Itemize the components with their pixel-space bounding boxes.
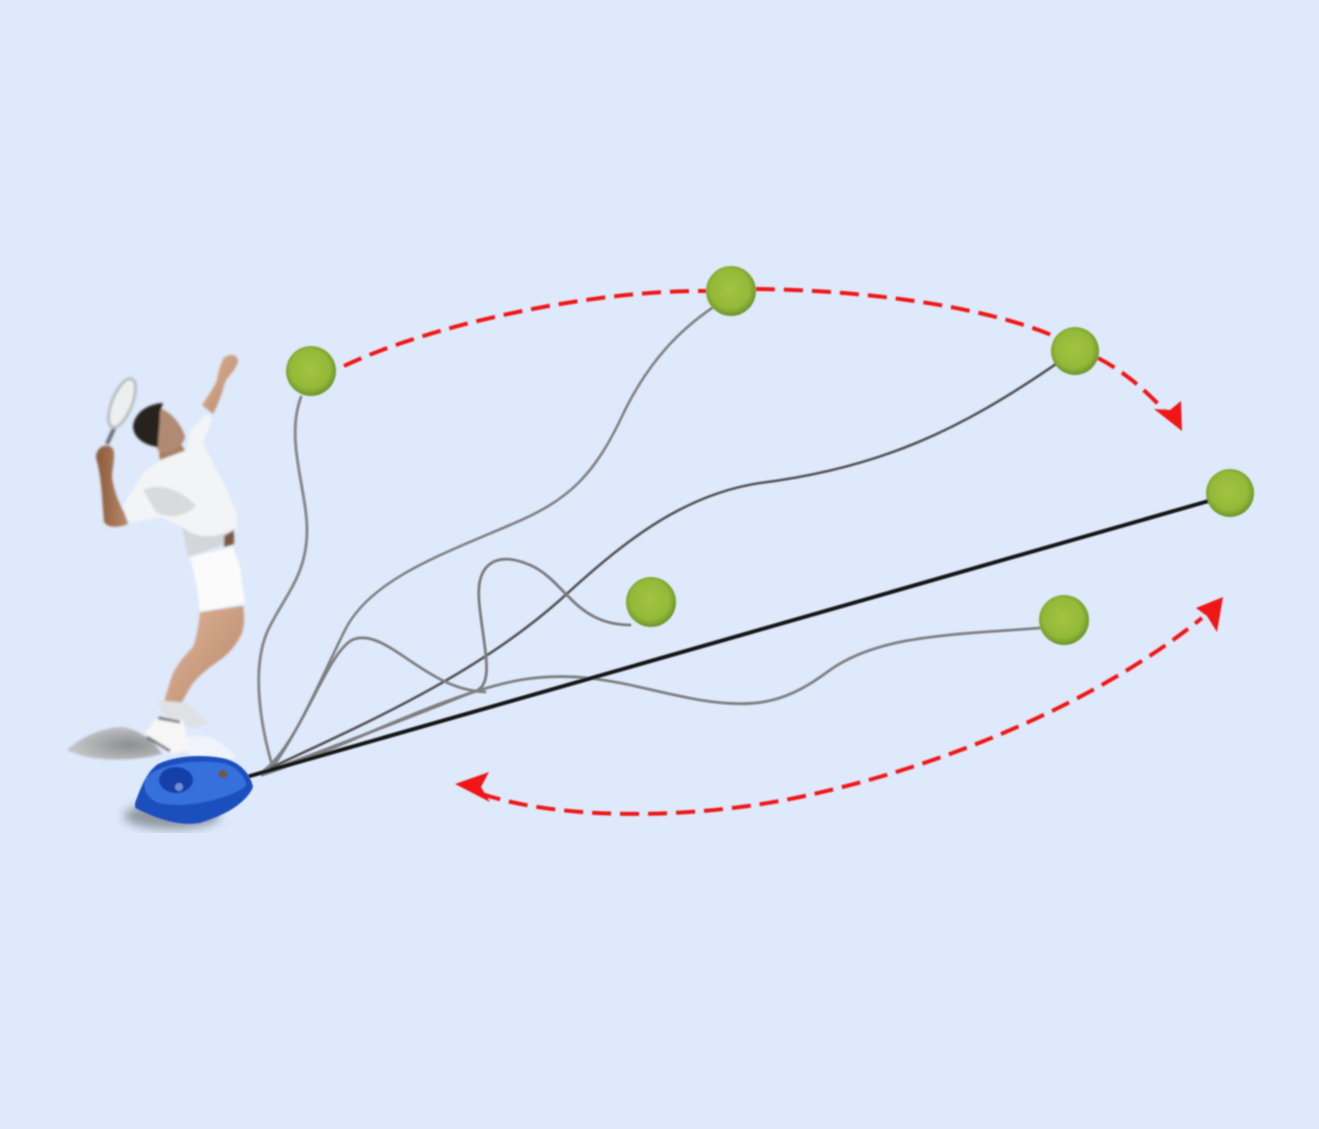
ball 5 <box>626 577 676 627</box>
main straight cord <box>250 500 1212 776</box>
racket arm <box>96 446 128 527</box>
shorts <box>190 547 245 612</box>
waist skin <box>224 530 234 547</box>
neck <box>158 440 186 462</box>
ball 4 <box>1206 469 1254 517</box>
head <box>152 408 185 453</box>
ball 3 <box>1051 327 1099 375</box>
ball 1 <box>286 346 336 396</box>
tennis player <box>67 355 245 764</box>
cord to ball 1 <box>259 397 307 765</box>
ball 2 <box>706 266 756 316</box>
lower red double-headed dashed arrow <box>455 597 1223 814</box>
white glow behind feet <box>176 735 236 764</box>
raised arm <box>202 355 238 414</box>
racket <box>103 375 141 444</box>
blue trainer base <box>124 756 253 829</box>
rear leg <box>162 606 244 717</box>
shoes <box>157 700 208 728</box>
trainer cords <box>250 308 1212 776</box>
court shadow <box>67 727 162 760</box>
cord hole <box>218 770 228 778</box>
ball 6 <box>1039 595 1089 645</box>
cord to ball 2 <box>272 308 712 768</box>
ball well <box>159 767 193 793</box>
upper red dashed arrow <box>344 289 1182 431</box>
cord to ball 4 <box>265 559 630 772</box>
cord to ball 5 <box>262 628 1040 775</box>
cord to ball 3 <box>262 364 1056 772</box>
shirt <box>122 413 237 557</box>
tennis balls <box>286 266 1254 645</box>
